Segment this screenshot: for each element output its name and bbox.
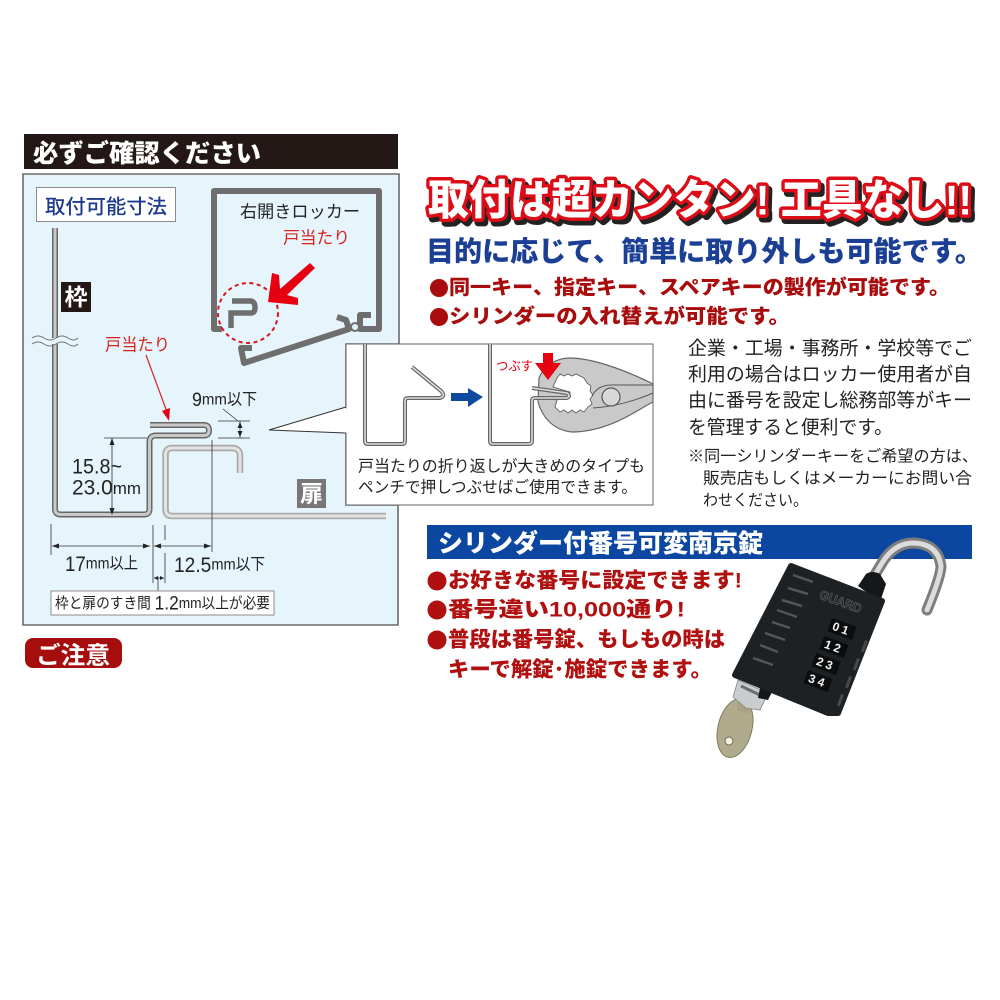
headline: 取付は超カンタン!工具なし!!: 取付は超カンタン! 工具なし!! xyxy=(428,176,972,224)
pliers xyxy=(538,358,653,432)
right profile: crushed fold xyxy=(490,344,569,444)
panel: mounting dimensions diagram xyxy=(23,174,399,625)
text: footnote: わせください。 xyxy=(703,492,808,510)
label: 扉: 扉 xyxy=(300,480,323,506)
heading: 必ずご確認ください: 必ずご確認ください xyxy=(33,134,261,170)
dial: 12: 12 xyxy=(823,637,845,657)
button: ご注意: ご注意 xyxy=(36,636,110,670)
grip grooves xyxy=(753,575,813,665)
bullet list: lock features: 普段は番号錠、もしもの時は xyxy=(448,628,725,652)
text: 右開きロッカー: 右開きロッカー xyxy=(240,202,360,222)
arrow: blue to the right xyxy=(451,388,483,407)
arrow: red press down xyxy=(535,353,561,380)
text: callout note: 戸当たりの折り返しが大きめのタイプも xyxy=(358,458,645,476)
text: usage paragraph xyxy=(688,338,972,438)
arrow: red pointing to door stop xyxy=(268,263,315,305)
bullet list: key and cylinder features: 同一キー、指定キー、スペアキーの製作が可能です。 xyxy=(449,275,950,299)
lock body xyxy=(735,566,882,713)
bullet list: key and cylinder features: シリンダーの入れ替えが可能です。 xyxy=(449,304,790,328)
panel: check heading bar xyxy=(24,134,398,170)
dial: 01: 01 xyxy=(831,619,853,639)
text: つぶす: つぶす xyxy=(496,358,533,374)
bullet list: lock features: 番号違い10,000通り! xyxy=(448,598,685,622)
text: usage paragraph: 企業・工場・事務所・学校等でご xyxy=(688,338,972,360)
note box: gap requirement: 枠と扉のすき間 1.2mm以上が必要 xyxy=(55,593,270,614)
text: usage paragraph: を管理すると便利です。 xyxy=(688,416,893,438)
dimension: 9mm or less xyxy=(192,390,257,438)
image: combination padlock with key xyxy=(711,543,941,761)
callout: pliers tip xyxy=(269,344,653,505)
cylinder xyxy=(733,680,773,710)
bullet list: lock features xyxy=(428,570,742,682)
dimension: 15.8~23.0mm: 15.8~ xyxy=(72,456,122,478)
frame profile xyxy=(32,228,209,514)
door profile xyxy=(166,448,386,516)
dial: 34: 34 xyxy=(807,671,829,691)
subheading: 目的に応じて: 目的に応じて、簡単に取り外しも可能です。 xyxy=(426,230,983,270)
locker top-view diagram xyxy=(214,191,379,363)
label: 取付可能寸法: 取付可能寸法 xyxy=(45,190,167,220)
text: footnote xyxy=(688,448,978,510)
bullet list: key and cylinder features xyxy=(430,275,950,328)
label: 枠 xyxy=(61,282,91,312)
bullet list: lock features: キーで解錠･施錠できます。 xyxy=(448,658,712,682)
text: callout note xyxy=(358,458,645,496)
text: 戸当たり (section): 戸当たり xyxy=(105,336,170,354)
shackle xyxy=(873,543,941,610)
text: usage paragraph: 利用の場合はロッカー使用者が自 xyxy=(688,364,972,386)
dimension: 15.8~23.0mm: 23.0mm xyxy=(72,476,141,500)
collar xyxy=(858,572,886,602)
arrow: leader to door stop xyxy=(146,355,170,421)
dial wheel edges xyxy=(837,640,868,706)
left profile: large fold xyxy=(365,344,443,444)
text: callout note: ペンチで押しつぶせばご使用できます。 xyxy=(358,478,637,496)
text: footnote: 販売店もしくはメーカーにお問い合 xyxy=(703,470,972,488)
text: 12.5mm以下: 12.5mm以下 xyxy=(174,554,265,576)
dial: 23: 23 xyxy=(815,654,837,674)
dimension lines: widths xyxy=(51,440,212,591)
banner: シリンダー付番号可変南京錠 xyxy=(427,524,972,560)
text: 戸当たり (locker): 戸当たり xyxy=(283,228,350,248)
text: usage paragraph: 由に番号を設定し総務部等がキー xyxy=(688,390,972,412)
key xyxy=(711,695,759,761)
dimension: 9mm or less: 9mm以下 xyxy=(192,390,257,410)
text: 17mm以上: 17mm以上 xyxy=(65,552,138,576)
banner: シリンダー付番号可変南京錠: シリンダー付番号可変南京錠 xyxy=(438,524,763,560)
dimension: 15.8~23.0mm xyxy=(72,438,147,515)
headline: 取付は超カンタン!工具なし!!: 取付は超カンタン! 工具なし!! xyxy=(431,180,975,228)
text: footnote: ※同一シリンダーキーをご希望の方は、 xyxy=(688,448,978,466)
brand: GUARD: GUARD xyxy=(817,587,864,616)
label: 枠: 枠 xyxy=(64,284,88,310)
bullet list: lock features: お好きな番号に設定できます! xyxy=(448,570,742,592)
